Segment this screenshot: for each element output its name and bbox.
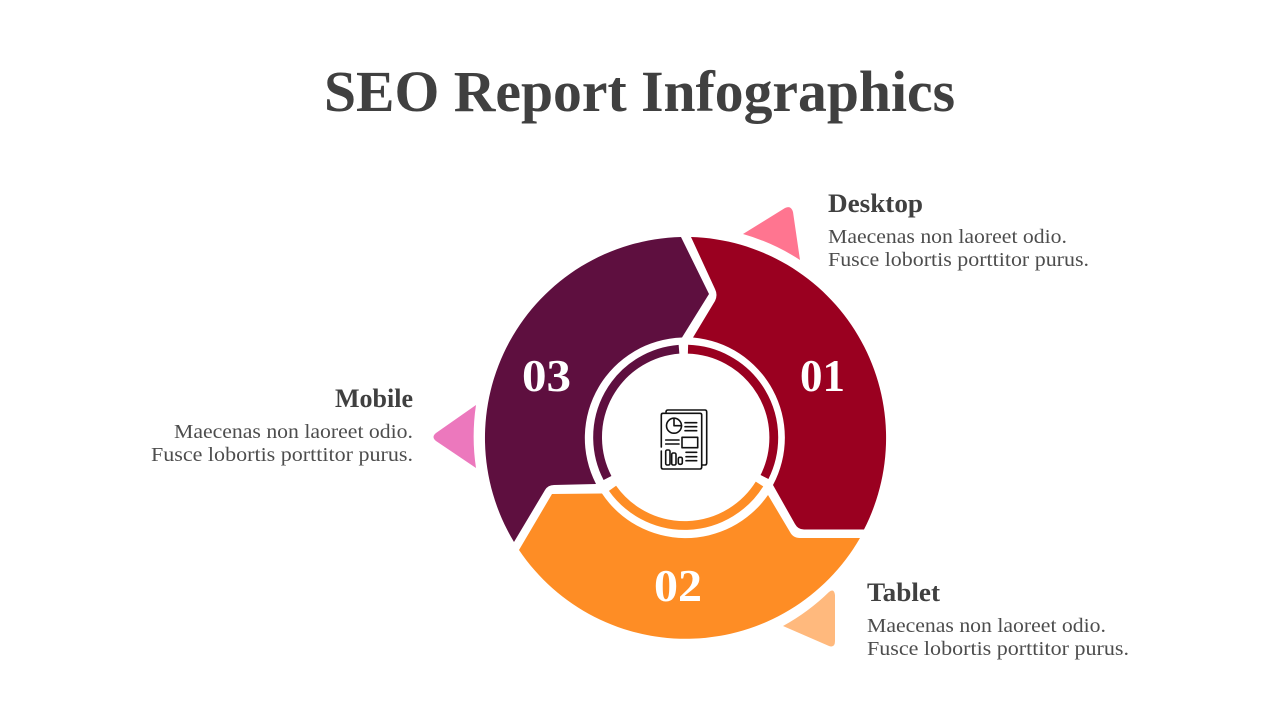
inner ring arc: orange [612, 484, 760, 526]
number 02: 02 [654, 560, 702, 611]
text block: mobile: Mobile [335, 384, 413, 413]
text block: tablet: Fusce lobortis porttitor purus. [867, 638, 1129, 660]
text block: desktop: Desktop [828, 189, 923, 218]
number 01: 01 [800, 350, 845, 401]
text block: mobile [151, 384, 413, 466]
text block: tablet [867, 578, 1129, 660]
text block: mobile: Maecenas non laoreet odio. [174, 421, 413, 443]
segment 03: purple [485, 237, 709, 542]
text block: desktop: Maecenas non laoreet odio. [828, 226, 1067, 248]
icon: report document [661, 410, 707, 469]
text block: mobile: Fusce lobortis porttitor purus. [151, 444, 413, 466]
arrow: tablet pointer [783, 591, 835, 646]
text block: tablet: Maecenas non laoreet odio. [867, 615, 1106, 637]
circular cycle diagram [485, 237, 886, 639]
inner ring arc: red [688, 349, 774, 477]
arrow: desktop pointer [743, 207, 800, 260]
title: SEO Report Infographics [324, 59, 955, 124]
text block: desktop [828, 189, 1089, 271]
segment 01: red [691, 237, 886, 530]
arrow: mobile pointer [434, 405, 476, 468]
text block: desktop: Fusce lobortis porttitor purus. [828, 249, 1089, 271]
number 03: 03 [522, 350, 571, 401]
text block: tablet: Tablet [867, 578, 940, 607]
inner ring arc: purple [598, 349, 679, 478]
segment 02: orange [519, 494, 860, 639]
